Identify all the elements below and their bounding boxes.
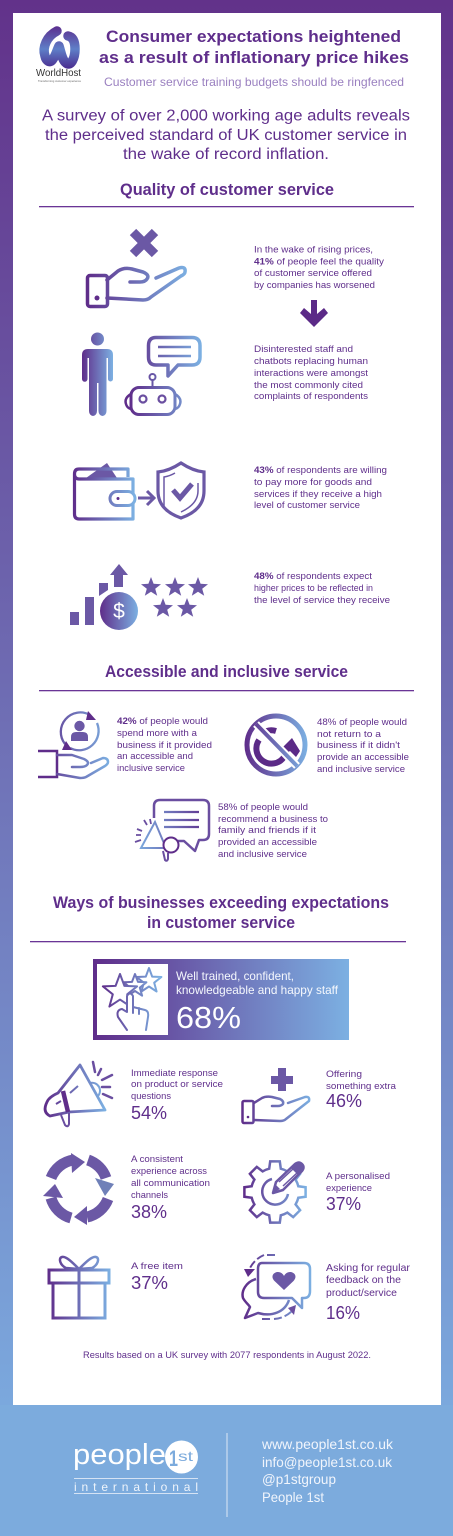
icon: stars and pointing hand xyxy=(103,968,161,1030)
text: 58%: family and friends if it xyxy=(218,825,316,836)
title: as a result of inflationary price hikes xyxy=(99,48,409,67)
title: Consumer expectations heightened xyxy=(106,27,401,46)
text: 48% would not return xyxy=(317,717,409,775)
text: 42%: inclusive service xyxy=(117,763,185,774)
icon: person and chatbot xyxy=(82,332,200,416)
footer band xyxy=(0,1405,453,1536)
text: 48%: higher prices to be reflected in xyxy=(254,583,373,594)
text: 42%: 42% of people would xyxy=(117,716,208,727)
logo: people 1st international xyxy=(73,1439,198,1494)
text: 41%: of customer service offered xyxy=(254,268,372,279)
text: 38% xyxy=(131,1154,210,1222)
text: free item: 37% xyxy=(131,1273,168,1293)
intro text: the perceived standard of UK customer service in xyxy=(45,127,407,144)
text: 43%: 43% of respondents are willing xyxy=(254,465,387,476)
contact details xyxy=(261,1436,394,1505)
intro text: the wake of record inflation. xyxy=(123,146,329,163)
text: 37% personalised: 37% xyxy=(326,1194,361,1214)
text: 46% xyxy=(326,1069,397,1111)
text: 38%: all communication xyxy=(131,1178,210,1189)
logo: WorldHost: WorldHost xyxy=(36,68,81,79)
text: 58%: recommend a business to xyxy=(218,814,328,825)
icon: hand with plus xyxy=(242,1068,309,1123)
text: 48% would not return: provide an accessible xyxy=(317,752,409,763)
text: 42% xyxy=(117,716,212,774)
icon: megaphone xyxy=(45,1062,112,1126)
icon: wallet and shield xyxy=(74,463,204,519)
text: 16%: feedback on the xyxy=(326,1274,401,1286)
text: 54%: on product or service xyxy=(131,1079,223,1090)
footnote: Results based on a UK survey with 2077 respondents in August 2022. xyxy=(83,1350,371,1361)
text: complaints: interactions were amongst xyxy=(254,368,368,379)
text: 54%: 54% xyxy=(131,1103,167,1123)
text: 48% xyxy=(254,571,390,606)
icon: dollar, bars and stars xyxy=(70,564,208,630)
arrow: down xyxy=(300,300,328,327)
icon: circular arrows xyxy=(43,1153,114,1225)
text: 46%: something extra xyxy=(326,1081,397,1092)
text: 58%: and inclusive service xyxy=(218,849,307,860)
panel: 68% well trained staff banner: Well trained, confident, xyxy=(176,969,294,983)
text: 41%: In the wake of rising prices, xyxy=(254,245,373,256)
intro text: A survey of over 2,000 working age adults reveals xyxy=(42,108,410,124)
text: 38%: channels xyxy=(131,1190,168,1201)
text: 42%: business if it provided xyxy=(117,740,212,751)
intro text xyxy=(42,108,410,163)
text: 48% would not return: 48% of people would xyxy=(317,717,407,728)
text: 54%: questions xyxy=(131,1091,171,1102)
text: 48%: the level of service they receive xyxy=(254,595,390,606)
text: complaints: Disinterested staff and xyxy=(254,344,353,355)
text: 58% xyxy=(218,802,328,860)
heading: ways of businesses exceeding expectations: in customer service xyxy=(147,913,295,932)
text: 38%: experience across xyxy=(131,1166,207,1177)
text: complaints: the most commonly cited xyxy=(254,380,363,391)
heading: ways of businesses exceeding expectations: Ways of businesses exceeding expectations xyxy=(53,893,389,912)
text: 48% would not return: business if it didn't xyxy=(317,740,400,751)
text: 16%: 16% xyxy=(326,1303,360,1323)
contact details: @p1stgroup xyxy=(262,1471,336,1487)
text: 43% xyxy=(254,465,387,511)
logo: people 1st international: international xyxy=(74,1480,198,1494)
heading: accessible and inclusive service: Accessible and inclusive service xyxy=(105,662,348,681)
text: 16%: product/service xyxy=(326,1287,397,1299)
subtitle: Customer service training budgets should be ringfenced xyxy=(104,75,404,89)
panel: 68% well trained staff banner xyxy=(93,959,349,1040)
text: 16%: Asking for regular xyxy=(326,1262,411,1274)
text: 43%: level of customer service xyxy=(254,500,360,511)
logo: WorldHost: Transforming customer experience xyxy=(38,79,81,83)
text: 46%: 46% xyxy=(326,1091,362,1111)
text: 37% personalised: experience xyxy=(326,1183,372,1194)
icon: feedback speech bubbles xyxy=(243,1255,310,1319)
contact details: www.people1st.co.uk xyxy=(261,1436,394,1452)
text: 58%: 58% of people would xyxy=(218,802,308,813)
text: complaints: complaints of respondents xyxy=(254,391,368,402)
contact details: People 1st xyxy=(262,1489,324,1505)
text: free item xyxy=(131,1261,183,1293)
text: 38%: 38% xyxy=(131,1202,167,1222)
text: 42%: an accessible and xyxy=(117,751,193,762)
divider xyxy=(226,1433,228,1517)
text: free item: A free item xyxy=(131,1261,183,1272)
icon: no-return prohibited symbol xyxy=(247,716,305,774)
heading: ways of businesses exceeding expectations xyxy=(53,893,389,932)
text: complaints xyxy=(254,344,368,402)
contact details: info@people1st.co.uk xyxy=(262,1454,393,1470)
icon: gear and pencil xyxy=(244,1161,306,1223)
logo: people 1st international: 1 xyxy=(169,1446,178,1471)
text: 48%: 48% of respondents expect xyxy=(254,571,372,582)
text: 38%: A consistent xyxy=(131,1154,183,1165)
logo: people 1st international: people xyxy=(73,1439,166,1471)
text: 48% would not return: not return to a xyxy=(317,729,382,740)
text: complaints: chatbots replacing human xyxy=(254,356,368,367)
text: 16% xyxy=(326,1262,411,1323)
text: 43%: services if they receive a high xyxy=(254,489,382,500)
logo: people 1st international: st xyxy=(178,1448,193,1464)
text: 54%: Immediate response xyxy=(131,1068,218,1079)
icon: hand with cross xyxy=(88,232,185,306)
icon: megaphone and speech bubble xyxy=(135,800,209,861)
panel: 68% well trained staff banner: knowledgeable and happy staff xyxy=(176,983,339,997)
logo: WorldHost xyxy=(36,31,81,83)
text: 41% xyxy=(254,245,384,291)
text: 48% would not return: and inclusive service xyxy=(317,764,405,775)
text: 42%: spend more with a xyxy=(117,728,198,739)
text: 37% personalised: A personalised xyxy=(326,1171,390,1182)
text: 54% xyxy=(131,1068,223,1123)
icon: gift box xyxy=(49,1257,109,1318)
text: 41%: by companies has worsened xyxy=(254,280,375,291)
text: 43%: to pay more for goods and xyxy=(254,477,372,488)
title xyxy=(99,27,409,67)
heading: quality of customer service: Quality of customer service xyxy=(120,180,334,199)
panel: 68% well trained staff banner: 68% xyxy=(176,1000,241,1035)
icon: dollar, bars and stars: $ xyxy=(113,600,125,623)
icon: person in cycle over hand xyxy=(38,711,108,778)
text: 46%: Offering xyxy=(326,1069,362,1080)
text: 37% personalised xyxy=(326,1171,390,1214)
text: 58%: provided an accessible xyxy=(218,837,317,848)
text: 41%: 41% of people feel the quality xyxy=(254,256,384,268)
